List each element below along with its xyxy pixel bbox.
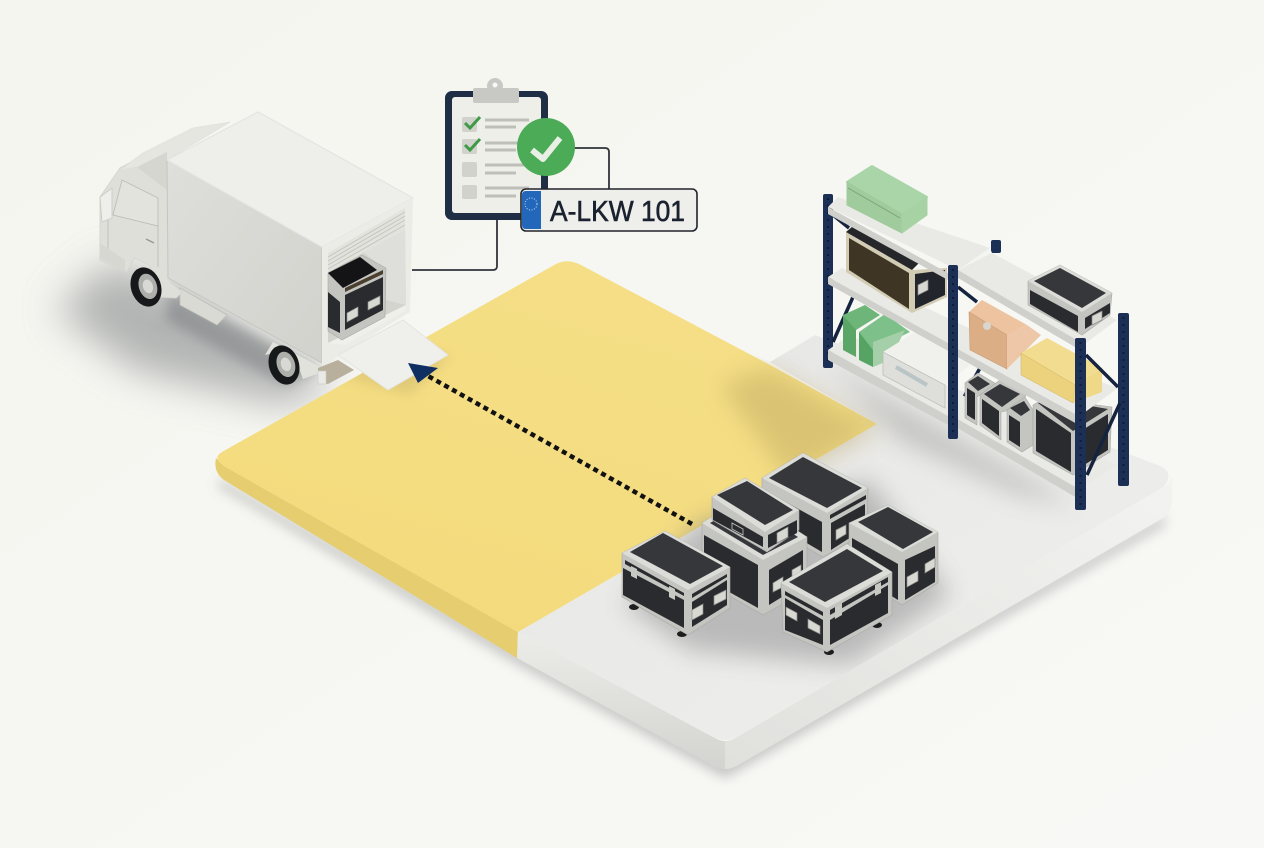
checklist row 4 <box>462 185 529 199</box>
rear post left <box>823 194 833 368</box>
cargo box top <box>167 112 413 247</box>
middle shelf right <box>954 335 1118 424</box>
small black cases <box>965 373 1033 452</box>
front post centre <box>948 265 958 439</box>
checklist clipboard <box>445 78 548 220</box>
cab <box>100 122 230 298</box>
platform yellow edge <box>215 458 518 658</box>
cab roof fairing <box>120 122 230 192</box>
flight case: rear <box>762 453 868 557</box>
rear fender <box>265 342 322 379</box>
truck <box>100 112 448 390</box>
headlight <box>100 188 112 222</box>
checklist row 1 <box>462 117 529 132</box>
top shelf right <box>958 253 1117 350</box>
loading platform <box>215 261 1172 778</box>
front wheel <box>126 263 166 311</box>
plate number: A-LKW 101 <box>550 196 685 228</box>
rear wheel <box>264 341 304 389</box>
cargo box side <box>167 160 322 363</box>
bottom shelf left <box>828 335 990 425</box>
shelf braces <box>833 215 980 408</box>
green cases <box>843 305 910 367</box>
plate EU band <box>522 191 541 229</box>
flight case: front centre <box>781 544 892 655</box>
top shelf left <box>828 197 992 280</box>
surface shadows <box>340 350 1075 665</box>
front braces <box>1086 355 1120 475</box>
ramp <box>338 320 448 390</box>
clipboard board <box>445 91 548 220</box>
dotted route arrow <box>408 363 692 524</box>
green case on top <box>847 166 927 233</box>
connector: truck to clipboard <box>412 218 497 270</box>
cargo rear frame <box>322 198 413 366</box>
cargo interior <box>328 228 406 343</box>
truck ground shadow <box>55 262 335 405</box>
clipboard clip <box>473 78 519 103</box>
arrow head <box>408 363 438 383</box>
flight case: right <box>849 505 938 605</box>
rear bumper <box>318 360 354 384</box>
flight case: stack lower <box>702 497 807 615</box>
bottom shelf right <box>954 405 1118 498</box>
rear post right <box>1118 313 1129 486</box>
green check badge <box>517 118 575 176</box>
clipboard paper <box>452 97 541 213</box>
connector: check badge to plate <box>570 148 609 190</box>
middle shelf left <box>828 268 990 351</box>
white case on shelf <box>883 332 970 408</box>
flight cases group <box>622 453 938 655</box>
platform grey edge <box>517 632 725 769</box>
yellow case <box>1021 338 1102 403</box>
platform grey surface <box>518 335 1169 740</box>
checklist row 2 <box>462 139 529 154</box>
undercarriage box <box>180 288 227 325</box>
tan case <box>969 300 1041 369</box>
roll-up door <box>328 208 405 272</box>
front post right <box>1075 338 1086 510</box>
flight case: stack upper <box>712 478 799 552</box>
large black case on bottom shelf <box>1033 398 1112 475</box>
licence plate <box>521 189 697 231</box>
black case on top right <box>1028 265 1112 335</box>
checklist row 3 <box>462 162 529 177</box>
flight case in truck <box>328 255 386 340</box>
flight case: front left <box>622 531 730 637</box>
yellow loading zone <box>217 261 877 632</box>
storage shelf <box>823 166 1129 510</box>
brown case <box>846 226 947 313</box>
rear post centre <box>991 240 1001 253</box>
cab window and door <box>108 180 158 267</box>
